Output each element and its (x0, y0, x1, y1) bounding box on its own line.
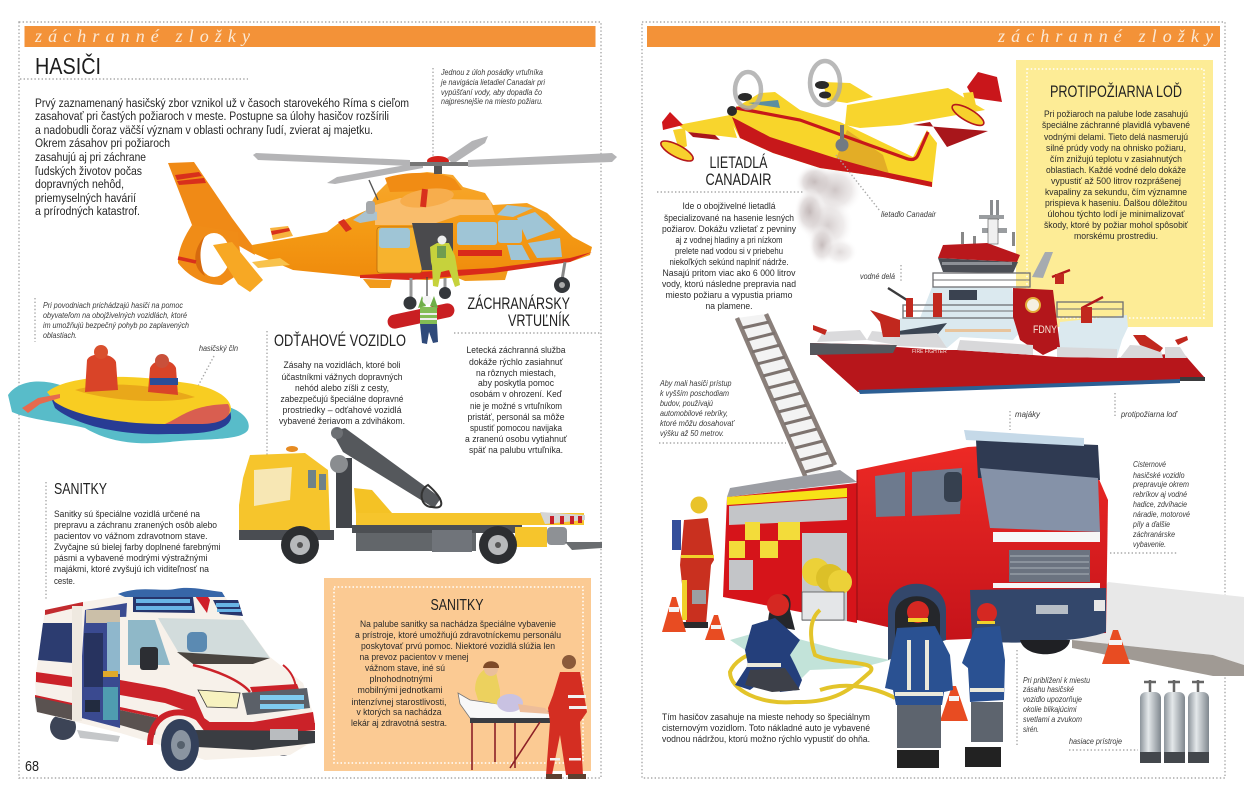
note: warning signals (1022, 675, 1090, 734)
text: Canadair: vody, ktorú následne prepravia nad (662, 279, 796, 290)
text: ambulances: majákmi, ktoré zvyšujú ich viditeľnosť na (54, 564, 210, 575)
text: fireboat: oblastiach. Každé vodné delo dokáže (1046, 165, 1186, 176)
note: floods (43, 300, 189, 340)
text: air rescue: aby poskytla pomoc (478, 378, 554, 389)
text: ambulance panel: na prevoz pacientov v menej (360, 652, 468, 663)
intro text: zasahujú aj pri záchrane (35, 150, 146, 164)
heading: ambulance panel: SANITKY (430, 597, 484, 614)
intro text (35, 96, 409, 218)
rescuer on door (430, 243, 460, 287)
note: warning signals: zásahu hasičské (1022, 684, 1074, 694)
note: tanker equipment: rebríkov aj vodné (1133, 489, 1187, 499)
intro text: Okrem zásahov pri požiaroch (35, 136, 170, 150)
label: beacons: majáky (1015, 409, 1041, 419)
label: extinguishers: hasiace prístroje (1069, 736, 1122, 746)
text: ambulance panel: lekár aj zdravotná sestra. (351, 718, 447, 729)
label: fireboat: protipožiarna loď (1120, 409, 1178, 419)
rotor (253, 136, 617, 184)
note: helicopter crew (440, 67, 546, 106)
text: Canadair (662, 201, 796, 312)
left page frame (19, 22, 601, 778)
text: fireboat: špeciálne záchranné plavidlá vybavené (1042, 120, 1190, 131)
intro text: dopravných nehôd, (35, 177, 124, 191)
stretcher with rescuer (386, 302, 456, 330)
text: tow truck: účastníkmi vážnych dopravných (282, 372, 402, 383)
left header band (24, 26, 596, 47)
text: fireboat: vodnými delami. Tieto delá nasmerujú (1044, 132, 1188, 143)
page number: 68 (25, 758, 39, 775)
text: tanker caption: vodnou nádržou, ktorú možno rýchlo vypustiť do ohňa. (662, 734, 870, 745)
label: Canadair plane: lietadlo Canadair (881, 209, 937, 219)
right page frame (642, 22, 1225, 778)
illustration: concrete slab (1072, 582, 1244, 676)
text: ambulances: pacientov vo vážnom zdravotnom stave. (54, 531, 208, 542)
text: air rescue: a zranenú osobu vytiahnuť (465, 434, 567, 445)
title: HASIČI (35, 52, 101, 79)
heading: Canadair: LIETADLÁ (710, 153, 768, 172)
text: tow truck: vybavené žeriavom a zdvihákom. (279, 416, 405, 427)
text: tow truck: Zásahy na vozidlách, ktoré boli (284, 360, 400, 371)
text: tanker caption: cisternovým vozidlom. Toto nákladné auto je vybavené (662, 723, 870, 734)
note: tanker equipment: hasičské vozidlo (1133, 470, 1185, 480)
intro text: a prírodných katastrof. (35, 204, 140, 218)
text: air rescue: na rôznych miestach, (476, 368, 556, 379)
text: fireboat (1042, 109, 1190, 242)
note: aerial ladders: automobilové rebríky, (660, 408, 728, 418)
intro text: a nadobudli čoraz väčší význam v oblasti ochrany ľudí, zvierat aj majetku. (35, 123, 373, 137)
landing gear (562, 262, 565, 280)
text: Canadair: špecializované na hasenie lesných (664, 213, 794, 224)
text: air rescue: osobám v ohrození. Keď (470, 389, 562, 400)
note: aerial ladders: výšku až 50 metrov. (660, 428, 724, 438)
text: tanker caption: Tím hasičov zasahuje na mieste nehody so špeciálnym (662, 712, 870, 723)
note: floods: Pri povodniach prichádzajú hasiči na pomoc (43, 300, 184, 310)
right header band: záchranné zložky (997, 26, 1213, 46)
heading: fireboat: PROTIPOŽIARNA LOĎ (1050, 82, 1182, 101)
note: tanker equipment: píly a ďalšie (1132, 519, 1170, 529)
text: tow truck (279, 360, 405, 427)
text: Canadair: prelete nad vodou si v priebehu (675, 246, 783, 257)
heading: tow truck: ODŤAHOVÉ VOZIDLO (274, 331, 406, 350)
text: ambulance panel: vážnom stave, iné sú (365, 663, 445, 674)
text: fireboat: vypustiť až 500 litrov rozprášenej (1051, 176, 1181, 187)
note: floods: obyvateľom na obojživelných vozidlách, ktoré (43, 310, 187, 320)
text: tow truck: nehód alebo zíšli z cesty, (295, 383, 389, 394)
illustration: firefighter with breathing apparatus (672, 496, 714, 628)
note: aerial ladders (659, 378, 735, 438)
illustration: traffic cones (662, 597, 1130, 721)
text: ambulance panel: intenzívnej starostlivosti, (352, 697, 446, 708)
text: Canadair: na plamene. (706, 301, 752, 312)
text: air rescue: dokáže rýchlo zasiahnuť (469, 357, 563, 368)
text: fireboat: úlohou týchto lodí je minimalizovať (1048, 209, 1185, 220)
illustration: firefighter side view (962, 603, 1005, 767)
text: air rescue: spustiť pomocou navijaka (470, 423, 563, 434)
note: aerial ladders: ktoré môžu dosahovať (660, 418, 735, 428)
text: Canadair: Nasajú pritom viac ako 6 000 litrov (662, 268, 796, 279)
illustration: rescue helicopter (168, 136, 617, 344)
note: tanker equipment: Cisternové (1133, 459, 1166, 469)
note: aerial ladders: Aby mali hasiči prístup (659, 378, 732, 388)
note: warning signals: Pri priblížení k miestu (1023, 675, 1090, 685)
intro text: Prvý zaznamenaný hasičský zbor vznikol už v časoch starovekého Ríma s cieľom (35, 96, 409, 110)
note: tanker equipment: záchranárske (1132, 529, 1175, 539)
illustration: ambulance (35, 588, 315, 771)
heading: ambulances: SANITKY (54, 481, 107, 498)
text: ambulances: ceste. (54, 576, 75, 587)
note: floods: im umožňujú bezpečný pohyb po zaplavených (43, 320, 189, 330)
right header band (647, 26, 1220, 47)
illustration: water spray (794, 164, 863, 266)
note: helicopter crew: Jednou z úloh posádky vrtuľníka (440, 67, 543, 77)
note: aerial ladders: budov, používajú (660, 398, 713, 408)
text: fireboat: čím znižujú teplotu v zasiahnutých (1050, 154, 1182, 165)
text: Canadair: aj z vodnej hladiny a pri nízkom (676, 235, 782, 246)
note: helicopter crew: najpresnejšie na miesto požiaru. (441, 96, 543, 106)
text: ambulance panel: Na palube sanitky sa nachádza špeciálne vybavenie (360, 619, 556, 630)
text: fireboat: morskému prostrediu. (1074, 231, 1158, 242)
text: air rescue: späť na palubu vrtuľníka. (469, 445, 563, 456)
text: fireboat: škody, ktoré by požiar mohol spôsobiť (1044, 220, 1188, 231)
heading: helicopter: ZÁCHRANÁRSKY (468, 294, 570, 313)
note: warning signals: okolie blikajúcimi (1023, 704, 1077, 714)
left header band: záchranné zložky (34, 26, 250, 46)
note: tanker equipment: vybavenie. (1133, 539, 1166, 549)
illustration: hose (730, 610, 895, 702)
heading: Canadair: CANADAIR (706, 170, 772, 189)
intro text: ľudských životov počas (35, 164, 142, 178)
text: air rescue: pristáť, personál sa môže (468, 412, 564, 423)
text: ambulance panel: v ktorých sa nachádza (356, 707, 442, 718)
text: Canadair: niekoľkých sekúnd naplniť nádrže. (670, 257, 788, 268)
illustration: FDNY fireboat (810, 200, 1205, 394)
text: tow truck: zabezpečujú špeciálne dopravné (280, 394, 404, 405)
text: air rescue: nie je možné s vrtuľníkom (470, 401, 562, 412)
heading: helicopter (468, 294, 570, 330)
note: tanker equipment: náradie, motorové (1133, 509, 1190, 519)
note: tanker equipment: prepravuje okrem (1132, 479, 1189, 489)
text: ambulances: pásmi a vybavené modrými výstražnými (54, 553, 208, 564)
intro text: zasahovať pri častých požiaroch v meste. Postupne sa úlohy hasičov rozšírili (35, 109, 389, 123)
text: air rescue: Letecká záchranná služba (466, 345, 566, 356)
label: water cannons: vodné delá (860, 271, 895, 281)
text: air rescue (465, 345, 567, 456)
text: tow truck: prostriedky – odťahové vozidlá (282, 405, 402, 416)
text: ambulances (54, 509, 220, 587)
text: ambulances: Sanitky sú špeciálne vozidlá určené na (54, 509, 201, 520)
text: fireboat: prispieva k haseniu. Ďalšou dôležitou (1045, 198, 1187, 209)
note: warning signals: vozidlo upozorňuje (1023, 694, 1082, 704)
text: fireboat: Pri požiaroch na palube lode zasahujú (1044, 109, 1188, 120)
note: aerial ladders: k vyšším poschodiam (660, 388, 729, 398)
illustration: tow truck (239, 427, 602, 564)
text: Canadair: Ide o obojživelné lietadlá (682, 201, 776, 212)
illustration: inflatable boat (8, 345, 249, 443)
illustration: paramedic and patient (458, 655, 587, 779)
heading: helicopter: VRTUĽNÍK (508, 311, 570, 330)
text: Canadair: požiarov. Dokážu vzlietať z pevniny (662, 224, 796, 235)
illustration: kneeling firefighter (735, 594, 802, 692)
panel: ambulance interior (324, 578, 591, 779)
note: floods: oblastiach. (43, 330, 77, 340)
illustration: FDNY fireboat: FDNY (1033, 324, 1058, 336)
text: ambulances: prepravu a záchranu zranených osôb alebo (54, 520, 217, 531)
text: ambulance panel: plnohodnotnými (370, 674, 432, 685)
text: ambulances: Zvyčajne sú bielej farby doplnené farebnými (54, 542, 220, 553)
illustration: FDNY fireboat: FIRE FIGHTER (912, 349, 947, 355)
text: ambulance panel (351, 619, 561, 729)
note: tanker equipment (1132, 459, 1190, 549)
note: helicopter crew: vypúšťaní vody, aby dopadla čo (441, 87, 542, 97)
note: warning signals: svetlami a zvukom (1023, 714, 1082, 724)
text: fireboat: kvapaliny za sekundu, čím významne (1045, 187, 1187, 198)
illustration: Canadair plane (658, 61, 1002, 187)
text: ambulance panel: poskytovať prvú pomoc. Niektoré vozidlá slúžia len (361, 641, 555, 652)
intro text: priemyselných havárií (35, 191, 137, 205)
illustration: fire engine (723, 430, 1108, 690)
illustration: gas cylinders (1140, 680, 1209, 763)
text: tanker caption (662, 712, 870, 745)
illustration: fire ladder (737, 314, 835, 478)
text: fireboat: silné prúdy vody na ohnisko požiaru, (1046, 143, 1186, 154)
note: warning signals: sirén. (1023, 724, 1039, 734)
text: ambulance panel: mobilnými jednotkami (358, 685, 442, 696)
panel: fireboat text (1016, 60, 1213, 327)
note: helicopter crew: je navigácia lietadiel Canadair pri (440, 77, 546, 87)
illustration: firefighter from behind (885, 601, 953, 768)
text: Canadair: miesto požiaru a vypustia priamo (666, 290, 792, 301)
heading: Canadair (706, 153, 772, 189)
label: fire boat dinghy: hasičský čln (199, 343, 238, 353)
note: tanker equipment: hadice, zdvíhacie (1133, 499, 1187, 509)
text: ambulance panel: a prístroje, ktoré umožňujú zdravotníckemu personálu (355, 630, 561, 641)
